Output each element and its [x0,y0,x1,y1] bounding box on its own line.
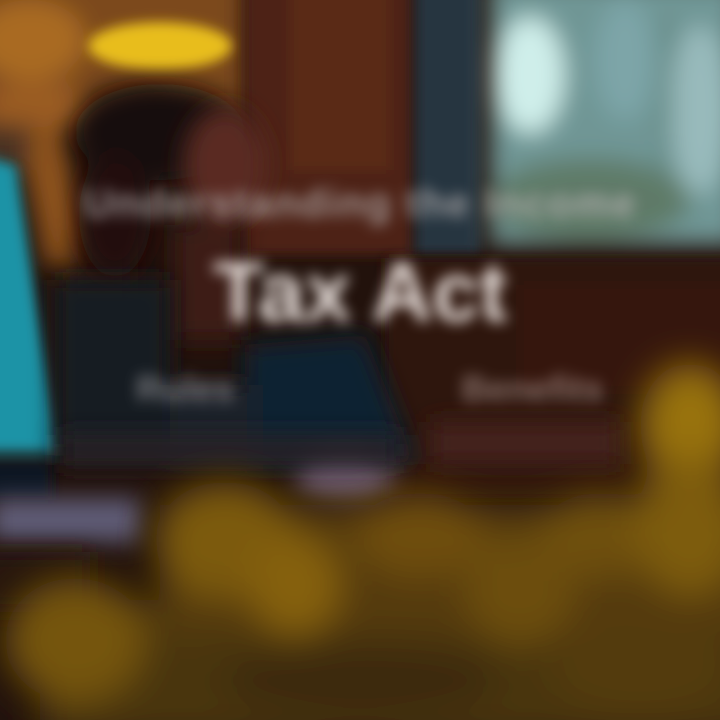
title: Tax Act: Tax Act [213,245,507,339]
right wall dark brown [385,258,720,498]
window [490,0,720,245]
heading line: Understanding the Income [83,180,637,226]
table edge [0,422,620,612]
right label: Benefits [461,368,604,409]
teal garment [0,155,58,500]
dark blue-grey column [415,0,480,255]
brown column [245,0,413,255]
left label: Rules [136,368,234,409]
hair [75,84,245,277]
wooden wall top left [0,0,245,290]
yellow lamp [88,22,232,70]
pale sleeve [0,454,395,542]
golden foliage foreground [5,363,720,720]
navy clothing [55,280,415,465]
face [175,107,267,340]
